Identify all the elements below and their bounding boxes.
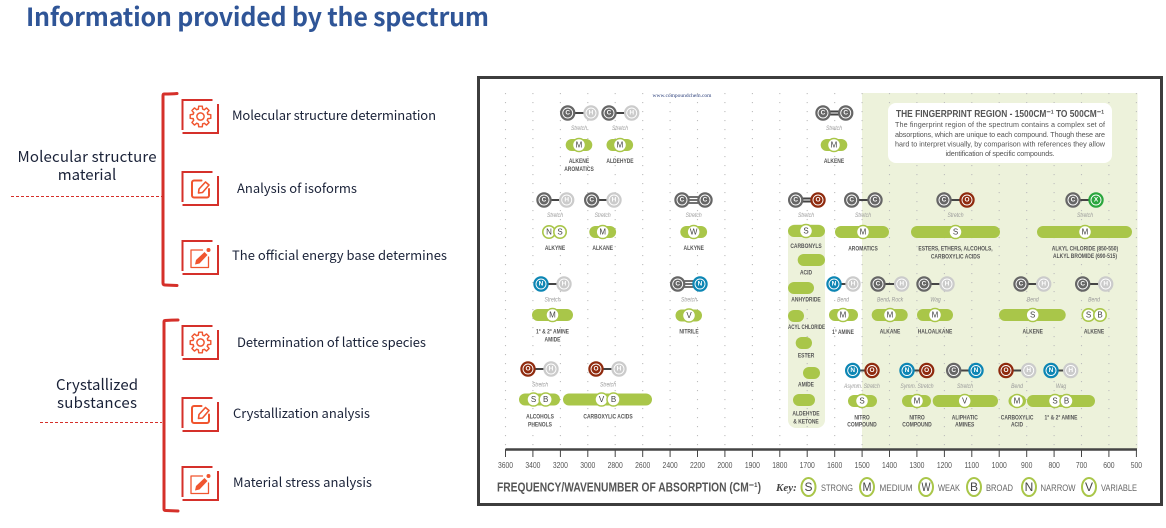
- carbonyl sub-bands: ACID: [800, 270, 812, 277]
- row 2: C≡C stretch alkyne: Stretch: [686, 213, 702, 219]
- carbonyl sub-bands: ALDEHYDE: [792, 411, 820, 418]
- row 2: C-H stretch alkyne: [536, 192, 574, 252]
- row 1: C=C stretch alkene: [815, 105, 853, 165]
- row 2: C=O stretch carbonyls: [788, 192, 826, 250]
- row 2: C-H stretch alkyne: ALKYNE: [545, 245, 565, 252]
- legend key: STRONG: [821, 483, 853, 494]
- row 4: O-H bend carboxylic acid: CARBOXYLIC: [1001, 415, 1034, 422]
- row 2: C-C stretch aromatics: AROMATICS: [848, 246, 878, 253]
- row 4: N-O symmetric stretch nitro: NITRO: [909, 415, 925, 422]
- row 2: C-X stretch alkyl halides: C: [1071, 196, 1076, 204]
- row 2: C≡C stretch alkyne: [674, 192, 713, 252]
- item: crystallization analysis: Crystallization analysis: [233, 403, 370, 422]
- row 2: C-H stretch alkyne: H: [564, 196, 569, 204]
- item: material stress analysis: Material stress analysis: [233, 472, 372, 491]
- item: official energy base: The official energy base determines: [232, 245, 447, 264]
- x axis: 1800: [772, 460, 787, 470]
- row 4: O-H stretch alcohols: B: [543, 395, 548, 404]
- item: determination of lattice species: Determination of lattice species: [237, 332, 426, 351]
- row 3: C-H bend rock alkane: ALKANE: [880, 329, 900, 336]
- row 2: C-O stretch esters: S: [953, 228, 958, 236]
- row 3: N-H stretch amine amide: Stretch: [544, 297, 561, 304]
- row 4: O-H stretch carboxylic acids: O: [593, 366, 599, 372]
- row 2: C-O stretch esters: ESTERS, ETHERS, ALCOHOLS,: [918, 246, 993, 253]
- row 3: C-H bend alkene S: [999, 276, 1066, 336]
- row 3: N-H bend primary amine: H: [851, 280, 856, 288]
- row 4: O-H stretch alcohols: Stretch: [532, 382, 548, 389]
- row 4: C-N stretch aliphatic amines: ALIPHATIC: [952, 415, 978, 422]
- row 2: C-H stretch alkyne: C: [542, 196, 547, 204]
- x axis: 3000: [580, 460, 595, 470]
- row 2: C-C stretch aromatics: Stretch: [855, 213, 871, 219]
- row 4: N-H wag amine: H: [1068, 367, 1073, 374]
- legend key: NARROW: [1040, 483, 1076, 494]
- x axis: 2600: [635, 460, 650, 470]
- row 1: C-H stretch aldehyde: M: [617, 140, 624, 150]
- row 3: C≡N stretch nitrile: [670, 276, 708, 336]
- row 4: N-O symmetric stretch nitro: COMPOUND: [902, 422, 932, 429]
- x axis: 2000: [717, 460, 732, 470]
- item: determination of lattice species: [182, 326, 426, 359]
- bracket: [164, 320, 178, 511]
- row 4: O-H bend carboxylic acid: M: [1014, 396, 1021, 406]
- row 2: C≡C stretch alkyne: ALKYNE: [684, 245, 704, 252]
- row 3: N-H bend primary amine: Bend: [837, 297, 850, 304]
- row 2: C=O stretch carbonyls: S: [803, 226, 809, 236]
- row 1: C=C stretch alkene: C: [821, 110, 826, 116]
- row 2: C≡C stretch alkyne: C: [703, 196, 708, 204]
- row 4: C-N stretch aliphatic amines: [933, 363, 998, 429]
- row 3: C-H bend alkene S: ALKENE: [1023, 329, 1043, 336]
- row 2: C-X stretch alkyl halides: M: [1082, 228, 1089, 236]
- row 4: N-O symmetric stretch nitro: [899, 363, 934, 429]
- x axis: 1400: [882, 460, 897, 470]
- row 2: C-H stretch alkyne: Stretch: [547, 213, 563, 219]
- x axis: [498, 449, 1142, 470]
- x axis: 1000: [992, 460, 1007, 470]
- callout: fingerprint region: identification of specific compounds.: [946, 149, 1054, 158]
- row 3: C-H bend rock alkane: M: [887, 310, 894, 320]
- heading: molecular structure material: Molecular structure: [18, 146, 156, 167]
- legend key: N: [1025, 480, 1033, 494]
- row 4: O-H stretch alcohols: PHENOLS: [528, 422, 552, 429]
- row 4: O-H stretch alcohols: H: [549, 366, 554, 372]
- legend key: V: [1085, 480, 1093, 494]
- carbonyl sub-bands: & KETONE: [793, 419, 819, 426]
- row 4: O-H stretch alcohols: ALCOHOLS: [526, 414, 554, 421]
- row 1: C=C stretch alkene: ALKENE: [824, 158, 844, 165]
- row 1: C-H stretch aldehyde: H: [629, 110, 634, 116]
- row 2: C=O stretch carbonyls: O: [815, 196, 821, 204]
- row 1: C=C stretch alkene: C: [843, 110, 848, 116]
- row 3: N-H stretch amine amide: M: [549, 310, 556, 320]
- row 4: N-H wag amine: 1° & 2° AMINE: [1045, 415, 1078, 422]
- panel: IR spectrum chart: [478, 78, 1162, 504]
- row 1: C=C stretch alkene: Stretch: [826, 126, 842, 132]
- carbonyl sub-bands: ANHYDRIDE: [791, 297, 821, 304]
- row 3: N-H bend primary amine: 1° AMINE: [832, 329, 854, 336]
- source url: www.compoundchem.com: [653, 93, 712, 99]
- row 2: C-H stretch alkane: Stretch: [595, 213, 611, 219]
- row 3: C-H bend alkene SB: B: [1097, 310, 1103, 320]
- row 2: C-H stretch alkane: M: [599, 228, 606, 236]
- panel: molecular structure material: [11, 94, 447, 286]
- row 2: C-C stretch aromatics: M: [860, 228, 867, 236]
- item: analysis of isoforms: [182, 172, 357, 205]
- row 1: C-H stretch alkene: M: [576, 140, 583, 150]
- row 3: C-H wag haloalkane: C: [922, 280, 927, 288]
- row 3: C-H bend alkene SB: ALKENE: [1084, 329, 1104, 336]
- row 1: C-H stretch alkene: H: [589, 110, 594, 116]
- legend key: B: [970, 480, 978, 494]
- row 4: N-O symmetric stretch nitro: Symm. Stretch: [900, 384, 934, 390]
- row 2: C-H stretch alkane: H: [612, 196, 617, 204]
- row 1: C-H stretch alkene: C: [565, 110, 570, 116]
- row 2: C-O stretch esters: Stretch: [947, 213, 964, 219]
- row 3: C-H bend rock alkane: [870, 276, 909, 336]
- legend key: W: [922, 480, 931, 494]
- row 4: O-H stretch carboxylic acids: V: [599, 395, 605, 404]
- row 2: C-X stretch alkyl halides: ALKYL BROMIDE (690-515): [1053, 253, 1117, 260]
- row 4: O-H bend carboxylic acid: Bend: [1011, 384, 1024, 390]
- item: official energy base: [182, 241, 447, 274]
- row 4: C-N stretch aliphatic amines: AMINES: [955, 422, 974, 429]
- x axis: 1900: [745, 460, 760, 470]
- row 1: C-H stretch aldehyde: ALDEHYDE: [606, 158, 634, 165]
- x axis: 1500: [855, 460, 870, 470]
- row 2: C-X stretch alkyl halides: X: [1094, 196, 1099, 204]
- row 3: C≡N stretch nitrile: C: [675, 280, 680, 288]
- row 3: C-H bend alkene S: Bend: [1027, 297, 1039, 304]
- row 3: C-H bend alkene SB: Bend: [1088, 297, 1101, 304]
- row 4: N-O asymmetric stretch nitro: COMPOUND: [847, 422, 877, 429]
- row 4: O-H stretch alcohols: O: [525, 366, 531, 372]
- row 4: C-N stretch aliphatic amines: V: [962, 396, 968, 406]
- row 4: O-H stretch carboxylic acids: H: [617, 366, 622, 372]
- legend key: BROAD: [986, 483, 1013, 494]
- row 3: C≡N stretch nitrile: Stretch: [681, 297, 697, 304]
- heading: molecular structure material: [18, 146, 156, 185]
- legend key: Key:: [775, 482, 797, 494]
- row 3: C≡N stretch nitrile: NITRILE: [679, 329, 699, 336]
- row 2: C-O stretch esters: C: [942, 196, 947, 204]
- heading: crystallized substances: Crystallized: [56, 374, 138, 395]
- item: analysis of isoforms: Analysis of isoforms: [237, 178, 357, 197]
- row 4: C-N stretch aliphatic amines: Stretch: [957, 384, 973, 390]
- row 3: C-H bend alkene SB: C: [1080, 280, 1085, 288]
- row 4: O-H stretch carboxylic acids: [563, 361, 652, 421]
- row 3: C-H bend rock alkane: Bend, Rock: [877, 297, 904, 304]
- row 3: C-H bend alkene S: C: [1019, 280, 1024, 288]
- bracket: [163, 94, 177, 286]
- item: molecular structure determination: [182, 100, 436, 133]
- row 2: C-H stretch alkane: ALKANE: [592, 245, 613, 252]
- row 2: C-H stretch alkane: C: [589, 196, 594, 204]
- row 2: C-H stretch alkane: [584, 192, 622, 252]
- row 4: N-O asymmetric stretch nitro: [843, 363, 880, 429]
- row 4: N-O asymmetric stretch nitro: N: [850, 367, 855, 374]
- row 2: C=O stretch carbonyls: CARBONYLS: [790, 243, 822, 250]
- row 4: N-O symmetric stretch nitro: M: [914, 396, 921, 406]
- row 4: N-O asymmetric stretch nitro: Asymm. Stretch: [843, 384, 880, 390]
- row 4: O-H stretch alcohols: S: [531, 395, 536, 404]
- heading: crystallized substances: [56, 374, 138, 413]
- x axis: 1700: [800, 460, 815, 470]
- row 3: C≡N stretch nitrile: V: [686, 311, 692, 320]
- row 4: N-H wag amine: N: [1049, 367, 1054, 374]
- row 2: C-O stretch esters: CARBOXYLIC ACIDS: [931, 254, 980, 261]
- row 3: C-H bend alkene S: S: [1030, 310, 1035, 320]
- row 2: C-O stretch esters: [911, 192, 1000, 261]
- x axis: 3400: [525, 460, 540, 470]
- callout: fingerprint region: The fingerprint region of the spectrum contains a complex set of: [895, 120, 1105, 129]
- row 3: C-H bend alkene SB: S: [1086, 310, 1091, 320]
- row 1: C-H stretch alkene: [560, 105, 599, 173]
- callout: fingerprint region: THE FINGERPRINT REGION - 1500CM⁻¹ TO 500CM⁻¹: [896, 108, 1104, 120]
- x axis: 800: [1048, 460, 1060, 470]
- row 1: C-H stretch aldehyde: Stretch: [612, 126, 628, 132]
- row 3: C-H wag haloalkane: H: [945, 280, 950, 288]
- x axis: 2800: [608, 460, 623, 470]
- row 4: N-O asymmetric stretch nitro: O: [869, 367, 875, 374]
- item: material stress analysis: [182, 467, 372, 500]
- row 2: C-H stretch alkyne: S: [557, 228, 563, 236]
- row 3: N-H bend primary amine: N: [832, 280, 837, 288]
- row 2: C≡C stretch alkyne: W: [690, 228, 698, 236]
- row 4: O-H bend carboxylic acid: ACID: [1011, 422, 1023, 429]
- row 4: N-H wag amine: [1027, 363, 1095, 422]
- carbonyl sub-bands: AMIDE: [798, 382, 814, 389]
- row 3: C-H wag haloalkane: M: [932, 310, 939, 320]
- row 4: N-O symmetric stretch nitro: N: [905, 367, 910, 374]
- x axis: 500: [1131, 460, 1142, 470]
- x axis: 2400: [663, 460, 678, 470]
- row 2: C≡C stretch alkyne: C: [680, 196, 685, 204]
- row 2: C-X stretch alkyl halides: [1037, 192, 1132, 260]
- callout: fingerprint region: absorptions, which are unique to each compound. Though these are: [895, 130, 1105, 139]
- row 2: C=O stretch carbonyls: C: [793, 196, 798, 204]
- row 3: C-H bend alkene SB: H: [1103, 280, 1108, 288]
- x axis: 1600: [827, 460, 842, 470]
- row 3: N-H bend primary amine: [826, 276, 861, 336]
- carbonyl sub-bands: ACYL CHLORIDE: [788, 324, 825, 331]
- row 3: N-H stretch amine amide: N: [539, 280, 544, 288]
- row 1: C-H stretch alkene: ALKENE: [569, 158, 589, 165]
- row 1: C-H stretch aldehyde: [601, 105, 639, 165]
- fingerprint region background: [862, 93, 1138, 449]
- carbonyl sub-bands: ESTER: [798, 353, 815, 360]
- heading: molecular structure material: material: [58, 164, 116, 185]
- x axis: 700: [1076, 460, 1087, 470]
- row 2: C-O stretch esters: O: [964, 196, 970, 204]
- row 1: C-H stretch alkene: AROMATICS: [564, 166, 594, 173]
- x axis: 900: [1021, 460, 1032, 470]
- x axis: 600: [1103, 460, 1115, 470]
- axis title: FREQUENCY/WAVENUMBER OF ABSORPTION (CM⁻¹): [497, 480, 761, 494]
- row 4: C-N stretch aliphatic amines: C: [951, 367, 956, 374]
- item: crystallization analysis: [182, 398, 370, 431]
- row 4: N-H wag amine: Wag: [1056, 384, 1067, 390]
- x axis: 2200: [690, 460, 705, 470]
- x axis: 3200: [553, 460, 568, 470]
- legend key: M: [862, 480, 872, 494]
- row 2: C=O stretch carbonyls: Stretch: [798, 213, 814, 219]
- heading: crystallized substances: substances: [57, 392, 137, 413]
- row 3: N-H stretch amine amide: 1° & 2° AMINE: [536, 329, 569, 336]
- row 3: N-H bend primary amine: M: [840, 310, 847, 320]
- row 4: O-H stretch carboxylic acids: Stretch: [600, 382, 616, 389]
- row 2: C-C stretch aromatics: [835, 192, 889, 253]
- row 3: C-H wag haloalkane: [916, 276, 955, 336]
- row 4: N-O symmetric stretch nitro: O: [924, 367, 929, 374]
- row 2: C-C stretch aromatics: C: [849, 196, 854, 204]
- row 1: C-H stretch alkene: Stretch: [571, 126, 587, 132]
- row 4: O-H bend carboxylic acid: H: [1026, 367, 1031, 374]
- x axis: 1200: [937, 460, 952, 470]
- carbonyl panel background: [788, 224, 825, 428]
- row 1: C=C stretch alkene: M: [831, 140, 838, 150]
- row 3: C-H bend rock alkane: H: [899, 280, 904, 288]
- row 4: N-O asymmetric stretch nitro: S: [859, 396, 865, 406]
- row 4: O-H stretch alcohols: [519, 361, 560, 429]
- row 2: C-C stretch aromatics: C: [873, 196, 878, 204]
- panel: crystallized substances: [40, 320, 426, 511]
- callout: fingerprint region: [888, 103, 1112, 163]
- row 1: C-H stretch aldehyde: C: [607, 110, 612, 116]
- row 3: C-H bend alkene S: H: [1041, 280, 1046, 288]
- row 3: N-H stretch amine amide: H: [562, 280, 567, 288]
- row 4: O-H stretch carboxylic acids: CARBOXYLIC ACIDS: [583, 414, 633, 421]
- x axis: 1100: [965, 460, 979, 470]
- carbonyl sub-bands: [788, 254, 825, 426]
- row 2: C-X stretch alkyl halides: Stretch: [1077, 213, 1093, 219]
- row 3: C-H bend rock alkane: C: [876, 280, 881, 288]
- row 3: C≡N stretch nitrile: N: [698, 280, 703, 288]
- row 2: C-X stretch alkyl halides: ALKYL CHLORIDE (850-550): [1052, 246, 1118, 253]
- legend key: [775, 478, 1137, 496]
- x axis: 1300: [909, 460, 924, 470]
- row 3: C-H wag haloalkane: Wag: [930, 297, 942, 304]
- row 4: N-H wag amine: B: [1064, 396, 1069, 406]
- row 4: O-H bend carboxylic acid: [998, 363, 1036, 429]
- row 4: O-H stretch carboxylic acids: B: [611, 395, 616, 404]
- item: molecular structure determination: Molecular structure determination: [232, 105, 436, 124]
- callout: fingerprint region: hard to interpret visually, by comparison with references they allow: [895, 140, 1106, 148]
- row 4: N-H wag amine: S: [1052, 396, 1058, 406]
- row 3: N-H stretch amine amide: AMIDE: [545, 337, 561, 344]
- legend key: WEAK: [938, 483, 961, 494]
- legend key: S: [804, 480, 813, 494]
- legend key: VARIABLE: [1101, 483, 1137, 494]
- x axis: 3600: [498, 460, 513, 470]
- row 3: C-H bend alkene SB: [1075, 276, 1113, 336]
- row 4: O-H bend carboxylic acid: O: [1003, 367, 1009, 374]
- row 4: N-O asymmetric stretch nitro: NITRO: [854, 415, 870, 422]
- row 2: C-H stretch alkyne: N: [546, 228, 552, 236]
- legend key: MEDIUM: [880, 483, 913, 494]
- row 3: C-H wag haloalkane: HALOALKANE: [918, 329, 952, 336]
- row 3: N-H stretch amine amide: [532, 276, 573, 344]
- row 4: C-N stretch aliphatic amines: N: [974, 367, 979, 374]
